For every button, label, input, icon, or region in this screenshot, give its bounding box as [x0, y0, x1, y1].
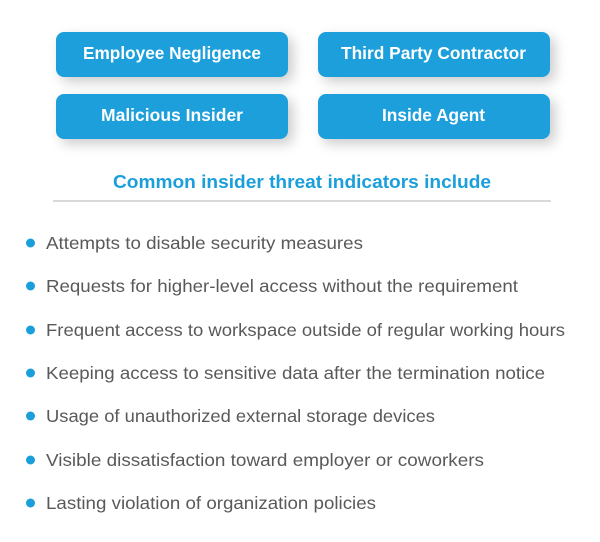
list item: higher-level access: Requests for higher-level access without the requirement	[46, 276, 518, 296]
button: Malicious Insider	[56, 94, 288, 139]
button: Employee Negligence: Employee Negligence	[83, 43, 261, 63]
button: Third Party Contractor	[318, 32, 550, 77]
list item: disable security: Attempts to disable security measures	[46, 233, 363, 253]
heading: Common insider threat indicators include	[113, 171, 491, 192]
indicator list	[26, 233, 565, 513]
list item: workspace access: Frequent access to workspace outside of regular working hours	[46, 320, 565, 340]
button: Malicious Insider: Malicious Insider	[101, 105, 243, 125]
button: Inside Agent: Inside Agent	[382, 105, 485, 125]
list item: dissatisfaction: Visible dissatisfaction toward employer or coworkers	[46, 450, 484, 470]
button: Inside Agent	[318, 94, 550, 139]
button: Employee Negligence	[56, 32, 288, 77]
button: Third Party Contractor: Third Party Contractor	[341, 43, 526, 63]
list item: sensitive data: Keeping access to sensitive data after the termination notice	[46, 363, 545, 383]
list item: external storage: Usage of unauthorized external storage devices	[46, 406, 435, 426]
list item: policy violation: Lasting violation of organization policies	[46, 493, 376, 513]
